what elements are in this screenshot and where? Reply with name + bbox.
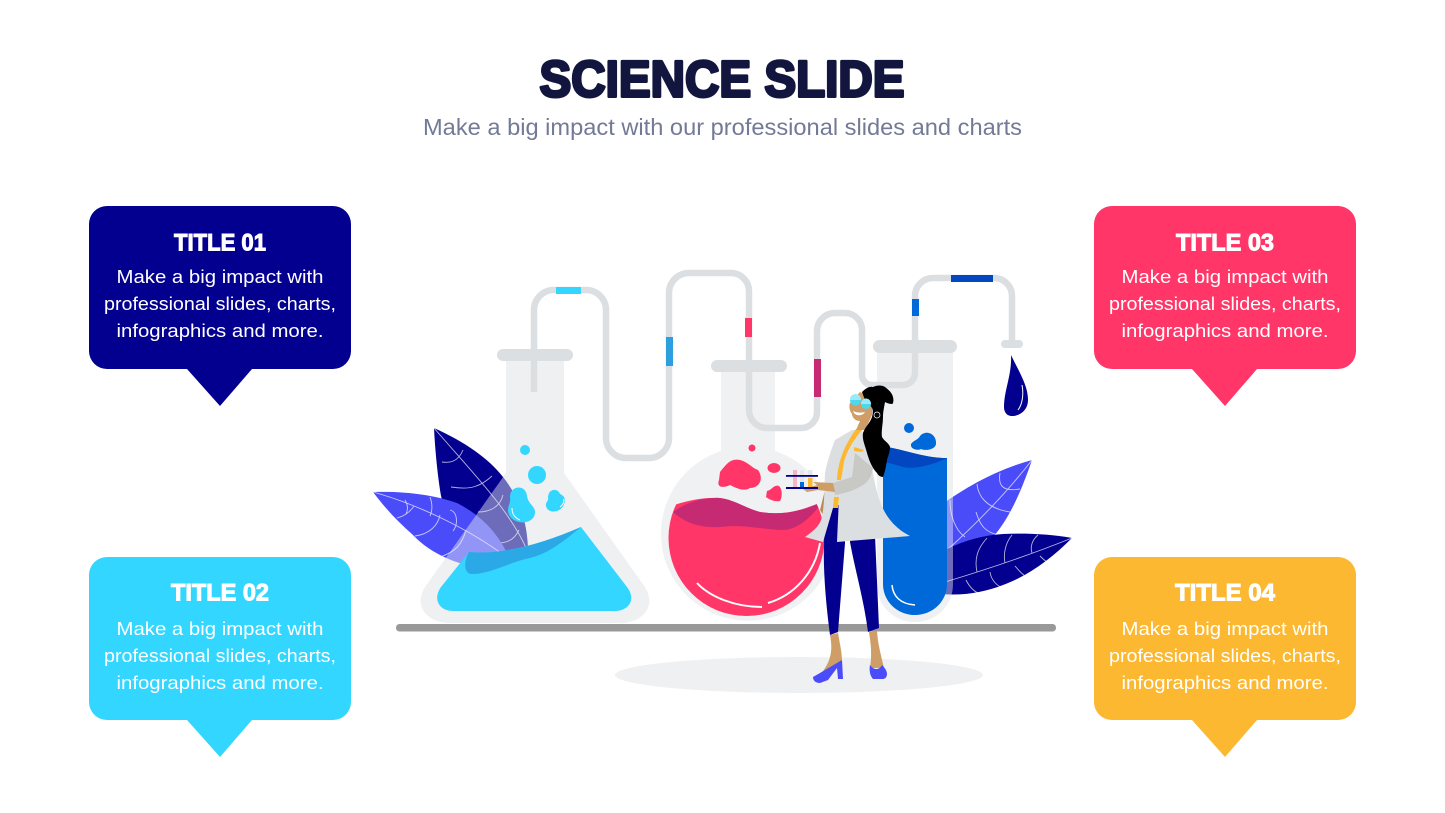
title: SCIENCE SLIDE: [540, 50, 904, 108]
sleeve: [833, 453, 873, 495]
flask: round base: [661, 370, 835, 621]
panel: title 02: TITLE 02: [171, 580, 269, 606]
panel: title 02: [89, 557, 351, 757]
panel: title 04: TITLE 04: [1175, 580, 1276, 606]
drop: [1004, 355, 1028, 416]
scientist: [786, 386, 910, 683]
shoes: [813, 660, 887, 683]
flask: conical base: [421, 360, 649, 623]
panel: title 02: infographics and more.: [116, 673, 324, 693]
test tube rack: [786, 470, 818, 489]
pocket pen: [854, 447, 864, 452]
glasses: [850, 394, 871, 409]
lower legs: [820, 631, 884, 675]
smile: [853, 411, 865, 415]
panel: title 03: [1094, 206, 1356, 406]
subtitle: Make a big impact with our professional slides and charts: [423, 114, 1022, 140]
forearm: [803, 482, 835, 492]
liquid: test tube: [883, 423, 947, 615]
liquid: conical flask: [437, 445, 631, 611]
panel: title 03: infographics and more.: [1122, 321, 1328, 341]
panel: title 01: professional slides, charts,: [104, 294, 336, 314]
hair: [862, 386, 893, 477]
flask overlay tint on leaves: [421, 345, 953, 623]
panel: title 04: [1094, 557, 1356, 757]
tubing: [534, 273, 1012, 458]
leaves: left: [373, 428, 528, 590]
panel: title 01: TITLE 01: [174, 230, 266, 256]
panel: title 03: professional slides, charts,: [1109, 294, 1341, 314]
panel: title 04: Make a big impact with: [1122, 619, 1328, 639]
shirt: [833, 429, 862, 508]
panel: title 03: TITLE 03: [1176, 230, 1274, 256]
earring: [874, 412, 880, 418]
panel: title 04: infographics and more.: [1122, 673, 1328, 693]
panel: title 04: professional slides, charts,: [1109, 646, 1341, 666]
panel: title 02: Make a big impact with: [116, 619, 324, 639]
panel: title 01: [89, 206, 351, 406]
legs: [824, 505, 879, 635]
shelf: [396, 624, 1056, 632]
coat: [805, 430, 910, 542]
panel: title 01: infographics and more.: [116, 321, 324, 341]
panel: title 02: professional slides, charts,: [104, 646, 336, 666]
panel: title 01: Make a big impact with: [116, 267, 324, 287]
floor shadow: [615, 657, 983, 693]
leaves: right: [935, 460, 1072, 595]
stoppers: [497, 340, 1023, 372]
arm behind: [820, 490, 828, 515]
flask: test tube base: [877, 345, 953, 622]
panel: title 03: Make a big impact with: [1122, 267, 1328, 287]
liquid: round flask: [668, 444, 824, 616]
neck and face: [849, 392, 872, 430]
